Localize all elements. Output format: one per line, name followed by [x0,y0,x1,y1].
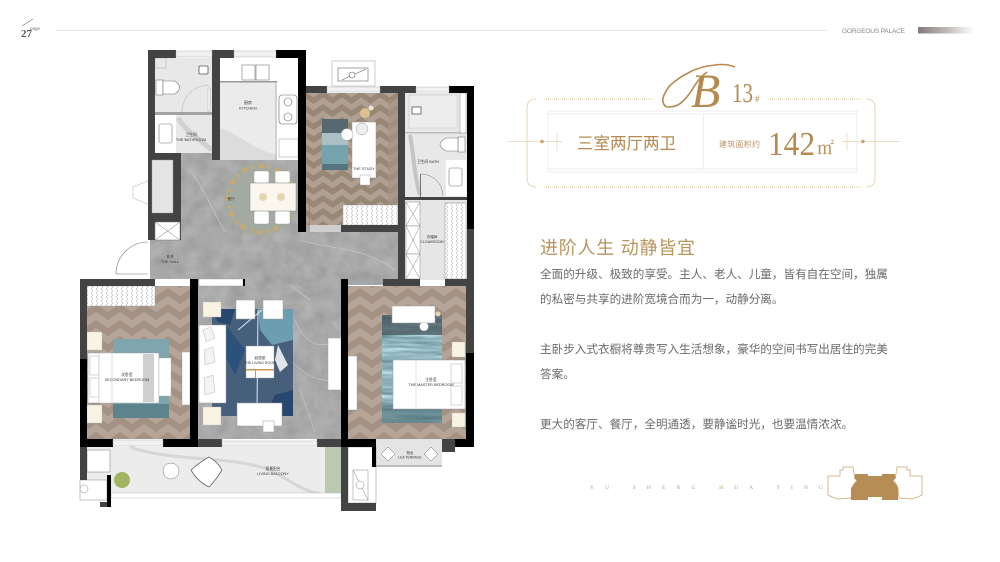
brand text: YU SHENG HUA TING [590,485,823,491]
label: balcony: LIVING BALCONY [257,472,289,476]
stool [163,463,179,479]
walls [80,50,474,511]
label: balcony: 观景阳台 [265,467,281,471]
rug [382,315,442,423]
side table [87,450,110,472]
bed [393,360,465,409]
dining chairs [254,171,290,224]
floor plan [80,50,474,511]
label: bathroom: 卫生间 BATH [417,159,439,164]
label: kitchen: KITCHEN [239,106,257,110]
armchairs [236,300,283,432]
dining table [250,183,296,211]
side tables [203,302,221,425]
description text: 全面的升级、极致的享受。主人、老人、儿童，皆有自在空间，独属 [540,268,888,281]
page header: page [30,26,41,31]
label: kitchen: 厨房 [244,100,252,105]
coffee table: THE LIVING ROOM [244,361,276,365]
icon: toilet [440,137,465,152]
building number: 13 [732,78,753,108]
tv console [328,338,341,390]
page header [21,18,971,40]
room: left bedroom [87,286,190,439]
building number: # [755,94,760,104]
room: cloakroom [405,200,467,280]
coffee table: 起居室 [255,356,265,360]
description text: 答案。 [540,368,575,381]
sink cabinet [155,115,176,153]
area value: 142 [768,126,815,163]
label: foyer: THE HALL [161,260,179,264]
right ornament [842,133,900,151]
entry door [116,180,150,274]
icon: wall basin [199,66,208,74]
rounded gold frame [527,99,875,187]
gold unit block [851,474,898,500]
rug [212,309,293,416]
bed: 次卧室 [121,373,133,377]
sofa [199,325,226,403]
bed: 主卧室 [425,378,437,382]
bed [88,353,159,403]
floor lamp [360,106,374,118]
room: master balcony [376,439,442,467]
label: bathroom: 卫生间 [185,133,197,137]
room: kitchen [220,58,298,160]
room: master balcony: 阳台 [407,451,413,455]
icon: gas stove [279,95,297,124]
entry closet boxes [152,160,180,240]
icon: toilet [156,80,180,95]
room: study [306,93,398,232]
ac units [80,447,376,503]
label: bathroom: THE BATHROOM [176,138,206,142]
room: bathroom one [155,58,212,153]
lounge sofa [392,306,440,331]
room: cloakroom: CLOAKROOM [420,240,444,244]
wardrobe [343,205,398,225]
spec panel [507,64,900,188]
bed: SECONDARY BEDROOM [105,378,149,382]
rug [113,339,169,418]
room: living room [199,279,341,432]
icon: potted plant [114,472,130,488]
room: master balcony: LEA TERRACE [398,456,422,460]
page header: GORGEOUS PALACE [842,28,906,35]
key plan [828,467,922,500]
room: dining: 餐厅 [227,196,235,201]
label: foyer: 玄关 [166,255,174,259]
tv console [348,356,357,410]
lounge chair [191,457,222,487]
room: cloakroom: 衣帽间 [427,235,437,239]
icon: double sink [242,65,269,80]
nightstands [452,342,465,427]
left ornament [507,133,562,151]
area value: ㎡ [817,134,834,159]
windows [113,51,449,446]
room: dining [224,162,298,236]
type letter B: B [691,65,720,118]
tv console [182,352,190,405]
description text: 主卧步入式衣橱将尊贵写入生活想象，豪华的空间书写出居住的完美 [540,343,888,356]
room: master bedroom [348,286,466,439]
room: balcony [87,447,341,498]
area label: 建筑面积约 [719,139,760,149]
description text: 的私密与共享的进阶宽境合而为一，动静分离。 [540,293,783,306]
inner box [548,111,857,172]
bay window [332,61,375,86]
rug [322,119,348,170]
coffee table [244,346,276,378]
layout type: 三室两厅两卫 [577,134,676,153]
nightstands [87,332,102,423]
sink cabinet [446,160,466,196]
heading: 进阶人生 动静皆宜 [540,238,696,258]
bed: THE MASTER BEDROOM [408,383,454,387]
description text: 更大的客厅、餐厅，全明通透，要静谧时光，也要温情浓浓。 [540,418,853,431]
type letter B [663,64,735,118]
daybed: THE STUDY [353,167,375,171]
room: bathroom two [405,93,467,197]
room: grey main floor [148,153,398,443]
page header: 27 [21,28,32,40]
